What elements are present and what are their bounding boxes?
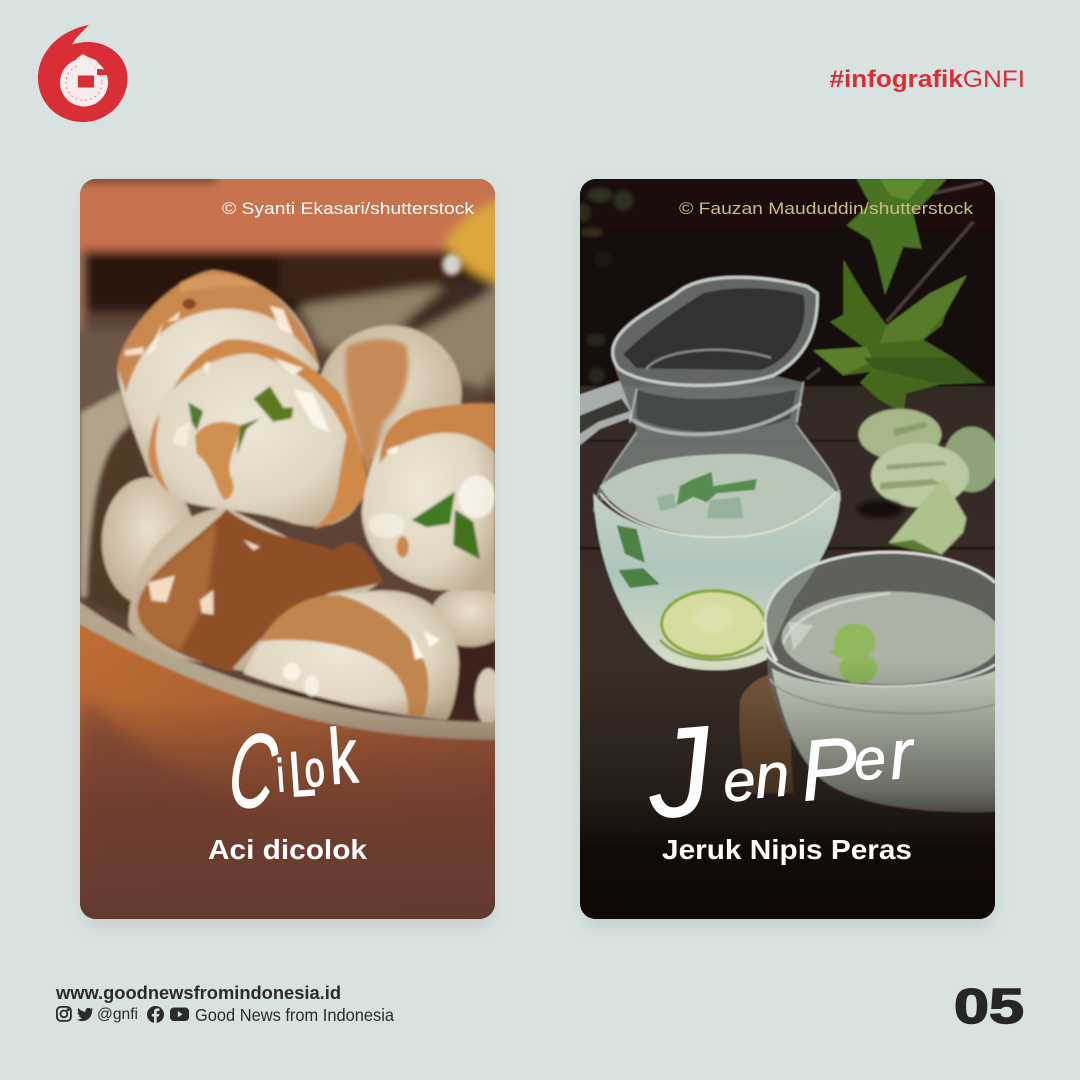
hashtag heading: #infografik GNFI xyxy=(830,66,1025,93)
social name: Good News from Indonesia xyxy=(195,1005,394,1025)
handwritten title: Cilok: k xyxy=(326,712,361,801)
handwritten title: Cilok: i xyxy=(275,751,286,802)
icon: instagram xyxy=(57,1007,71,1021)
handwritten title: Jenper: e xyxy=(851,726,889,793)
ball: far left xyxy=(102,477,195,606)
photo: lime juice jug and glass xyxy=(573,172,1002,943)
herbs xyxy=(253,386,293,422)
handwritten title: Jenper: n xyxy=(752,740,792,812)
jug glass highlights xyxy=(594,277,840,511)
vine stems xyxy=(807,183,983,379)
leaves xyxy=(813,179,985,413)
ball: bottom xyxy=(432,588,495,649)
handwritten title: Jenper: J xyxy=(641,699,718,845)
squeezed limes xyxy=(858,409,1000,555)
ball: brown sauce xyxy=(128,508,380,672)
ball: back right xyxy=(318,325,462,461)
handwritten title: Cilok: C xyxy=(223,710,283,833)
handwritten title: Jenper: r xyxy=(886,714,919,794)
website address: www.goodnewsfromindonesia.id xyxy=(55,982,341,1003)
bottom colour fade xyxy=(80,700,495,919)
bowl interior xyxy=(80,388,495,729)
handwritten title: Cilok: o xyxy=(303,742,327,798)
social handle: @gnfi xyxy=(97,1006,138,1023)
cup xyxy=(766,554,995,753)
photo: meatballs in a clay bowl xyxy=(80,179,495,919)
handwritten title: Jenper: P xyxy=(796,719,862,820)
dim foliage top left xyxy=(576,188,633,385)
jug handle xyxy=(580,380,634,446)
panel: Cilok card xyxy=(80,179,495,919)
handwritten title: Jenper: e xyxy=(720,747,758,815)
logo: GNFI red six with garuda G xyxy=(38,25,128,122)
subtitle: Aci dicolok: Aci dicolok xyxy=(208,834,367,865)
icon: twitter xyxy=(76,1008,93,1021)
wooden coaster xyxy=(739,672,793,793)
jug juice xyxy=(593,490,840,670)
handwritten title: Cilok: L xyxy=(287,738,317,810)
page number: 05 xyxy=(954,980,1024,1034)
icon: youtube xyxy=(170,1008,189,1021)
panel: Jenper card xyxy=(573,172,1002,943)
subtitle: Jeruk Nipis Peras: Jeruk Nipis Peras xyxy=(662,834,912,865)
photo credit: Syanti Ekasari: © Syanti Ekasari/shutterstock xyxy=(222,199,475,218)
card shadow right xyxy=(584,188,991,926)
ball: centre xyxy=(151,354,358,528)
bottom dark fade xyxy=(580,660,995,919)
jug upper glass xyxy=(600,277,840,522)
mint in jug xyxy=(617,472,757,588)
photo credit: Fauzan Maududdin: © Fauzan Maududdin/shutterstock xyxy=(679,199,974,218)
ball: top left xyxy=(117,270,319,475)
lime slice xyxy=(662,591,765,656)
card shadow left xyxy=(84,188,491,926)
bowl rim and body xyxy=(80,622,495,916)
icon: facebook xyxy=(147,1006,164,1023)
mint in cup xyxy=(828,624,878,683)
ball: right xyxy=(362,403,495,591)
handwritten title: Cilok xyxy=(223,710,361,833)
